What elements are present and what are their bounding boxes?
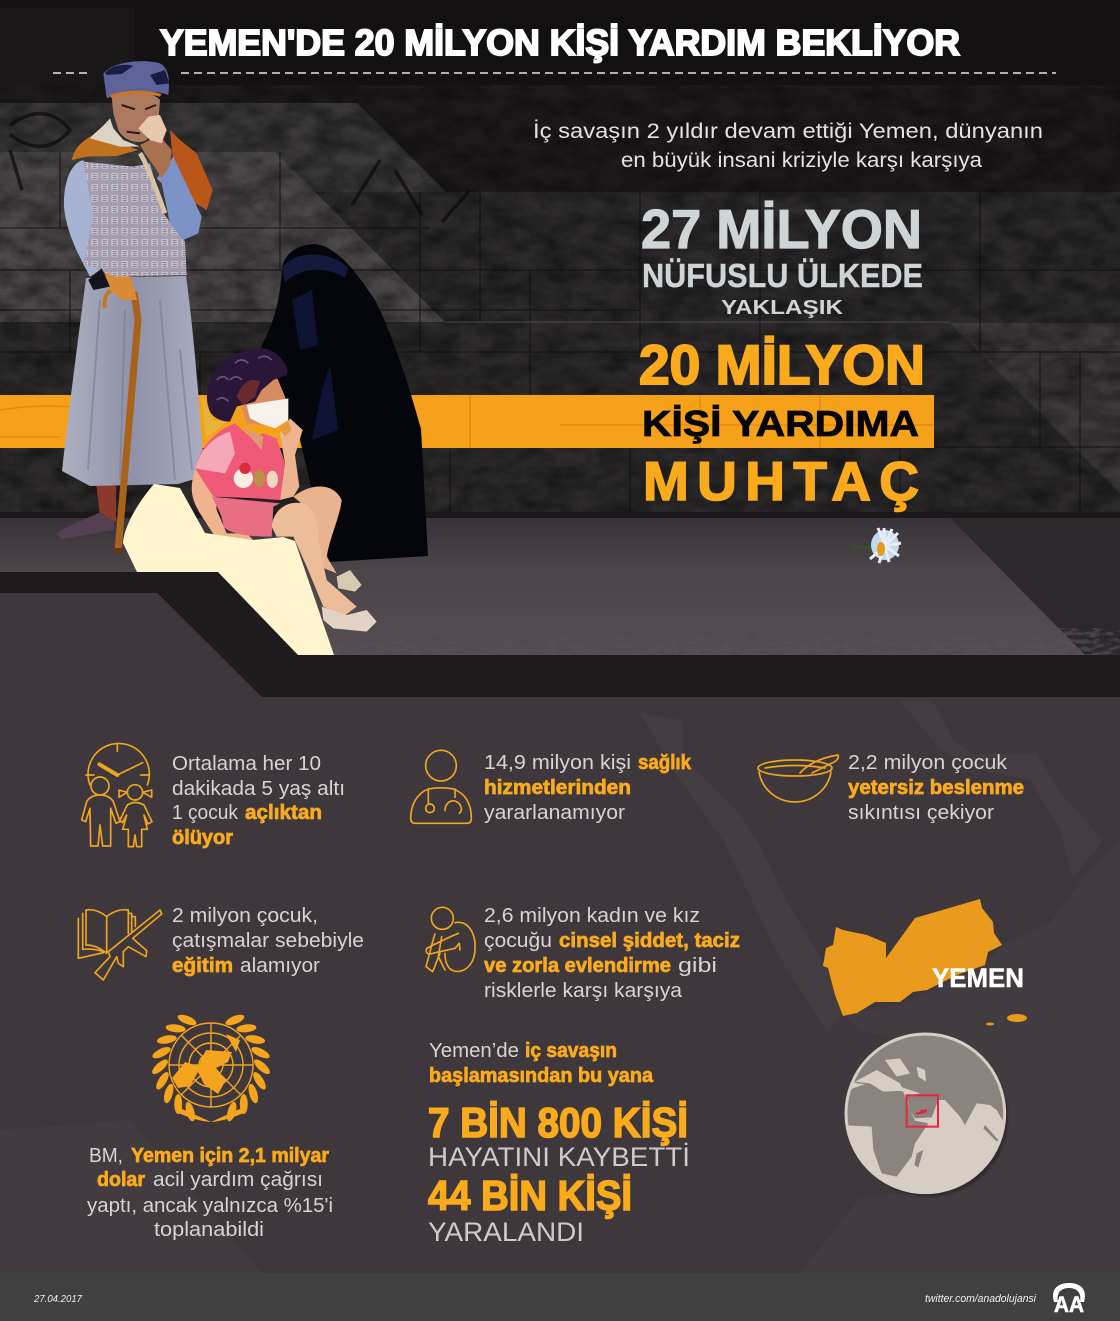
panel: lower information background xyxy=(0,572,1120,1273)
icon: clock and children xyxy=(82,743,152,847)
text: UN appeal: acil yardım çağrısı xyxy=(153,1169,323,1191)
text: hunger deaths: Ortalama her 10 xyxy=(172,753,321,775)
text: violence against women: cinsel şiddet, taciz xyxy=(559,930,740,952)
text: education: 2 milyon çocuk, xyxy=(172,905,318,927)
title divider dashes xyxy=(53,72,1056,74)
logo: Anadolu Agency: AA xyxy=(1054,1292,1084,1317)
text: UN appeal xyxy=(87,1145,333,1241)
headline stat: 27 million: 27 MİLYON xyxy=(641,198,922,260)
headline stat: 27 million: NÜFUSLU ÜLKEDE xyxy=(642,257,923,294)
text: UN appeal: toplanabildi xyxy=(154,1219,264,1241)
text: violence against women: ve zorla evlendirme xyxy=(484,955,671,977)
orange band xyxy=(0,395,934,448)
footer date: 27.04.2017 xyxy=(33,1294,82,1305)
text: hunger deaths: ölüyor xyxy=(172,827,233,849)
headline stat: 20 million: MUHTAÇ xyxy=(643,450,919,512)
text: hunger deaths xyxy=(172,753,345,849)
icon: UN emblem xyxy=(150,1013,272,1122)
text: violence against women: çocuğu xyxy=(484,930,552,952)
stat: malnutrition xyxy=(758,752,1024,824)
text: malnutrition xyxy=(848,752,1024,824)
text: malnutrition: yetersiz beslenme xyxy=(848,777,1024,799)
figure: child xyxy=(192,348,377,632)
headline stat: 20 million: 20 MİLYON xyxy=(639,333,925,396)
text: hunger deaths: dakikada 5 yaş altı xyxy=(172,778,345,800)
headline stat: 20 million: KİŞİ YARDIMA xyxy=(642,403,919,444)
lower body xyxy=(57,262,205,554)
text: violence against women: risklerle karşı karşıya xyxy=(484,980,683,1002)
icon: bowl and spoon xyxy=(758,755,838,802)
intro text xyxy=(533,120,1043,172)
footer bar xyxy=(0,1273,1120,1321)
text: violence against women: 2,6 milyon kadın ve kız xyxy=(484,905,700,927)
icon: daisy flower xyxy=(852,528,901,563)
text: education xyxy=(172,905,364,977)
text: health services: hizmetlerinden xyxy=(484,777,631,799)
text: UN appeal: BM, xyxy=(89,1145,123,1167)
intro text: İç savaşın 2 yıldır devam ettiği Yemen, dünyanın xyxy=(533,120,1043,143)
text: health services xyxy=(484,752,692,824)
stat: violence against women xyxy=(426,905,740,1002)
headline stat: 27 million xyxy=(641,198,923,319)
text: casualties intro: başlamasından bu yana xyxy=(429,1065,654,1087)
icon: book and rifle xyxy=(78,910,162,980)
text: casualties intro xyxy=(429,1040,654,1087)
upper body xyxy=(64,61,213,290)
text: casualties intro: iç savaşın xyxy=(525,1040,617,1062)
stat: casualties: 7 BİN 800 KİŞİ xyxy=(428,1099,688,1146)
text: health services: 14,9 milyon kişi xyxy=(484,752,631,774)
stat: casualties: 44 BİN KİŞİ xyxy=(428,1172,632,1219)
text: violence against women: gibi xyxy=(678,955,717,977)
text: health services: sağlık xyxy=(638,752,692,774)
text: health services: yararlanamıyor xyxy=(484,802,625,824)
figure: old man with cane xyxy=(57,61,213,554)
icon: doctor xyxy=(411,750,471,823)
text: UN appeal: dolar xyxy=(97,1169,145,1191)
text: violence against women xyxy=(484,905,740,1002)
map: Yemen: YEMEN xyxy=(932,963,1024,993)
figure: veiled woman xyxy=(255,244,428,562)
map: locator globe xyxy=(844,1032,1008,1197)
stat: casualties xyxy=(428,1099,690,1247)
stat: casualties: YARALANDI xyxy=(428,1217,584,1247)
text: education: alamıyor xyxy=(240,955,320,977)
headline stat: 20 million xyxy=(639,333,925,512)
text: casualties intro: Yemen’de xyxy=(429,1040,519,1062)
stat: health services xyxy=(411,750,692,824)
footer link: twitter.com/anadolujansi xyxy=(925,1293,1037,1305)
background: hero scene xyxy=(0,0,1120,697)
map: Yemen xyxy=(823,899,1027,1026)
title: YEMEN'DE 20 MİLYON KİŞİ YARDIM BEKLİYOR xyxy=(160,22,960,63)
headline stat: 27 million: YAKLAŞIK xyxy=(721,297,844,319)
logo: Anadolu Agency xyxy=(1053,1283,1085,1317)
stat: hunger deaths xyxy=(82,743,345,849)
text: education: eğitim xyxy=(172,955,233,977)
text: malnutrition: 2,2 milyon çocuk xyxy=(848,752,1008,774)
text: education: çatışmalar sebebiyle xyxy=(172,930,364,952)
figure: sack xyxy=(123,484,334,655)
stat: casualties: HAYATINI KAYBETTİ xyxy=(428,1141,690,1172)
text: hunger deaths: 1 çocuk xyxy=(172,802,239,824)
text: UN appeal: yaptı, ancak yalnızca %15'i xyxy=(87,1195,333,1217)
stat: education xyxy=(78,905,364,980)
icon: seated figure xyxy=(426,907,475,972)
text: hunger deaths: açlıktan xyxy=(245,802,322,824)
intro text: en büyük insani kriziyle karşı karşıya xyxy=(621,149,982,172)
text: UN appeal: Yemen için 2,1 milyar xyxy=(131,1145,329,1167)
text: malnutrition: sıkıntısı çekiyor xyxy=(848,802,994,824)
